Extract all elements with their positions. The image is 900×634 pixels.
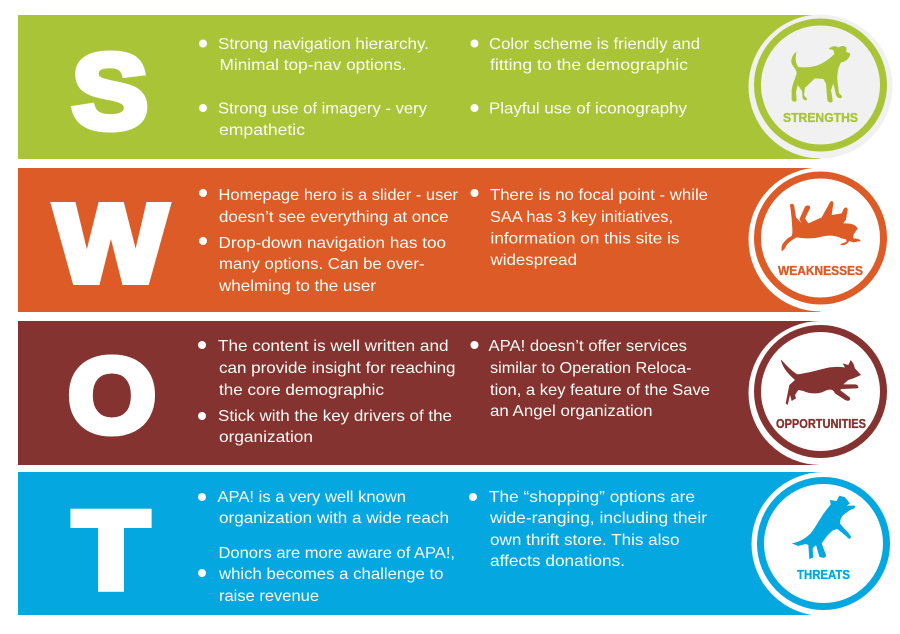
weaknesses bullets, left column: Drop-down navigation has too (218, 235, 446, 252)
opportunities bullets, right column: tion, a key feature of the Save (490, 382, 710, 399)
strengths band (18, 15, 820, 159)
threats bullets, right column (469, 489, 708, 570)
opportunities bullets, right column: APA! doesn’t offer services (488, 338, 687, 355)
opportunities bullets, left column: The content is well written and (218, 338, 448, 355)
threats bullets, right column: own thrift store. This also (490, 532, 680, 549)
weaknesses bullets, right column: There is no focal point - while (490, 187, 708, 204)
weaknesses bullets, left column: many options. Can be over- (219, 256, 424, 273)
strengths bullets, right column: fitting to the demographic (490, 57, 688, 74)
big letter W: W (55, 182, 167, 306)
big letter T: T (73, 490, 149, 612)
threats bullets, left column: raise revenue (219, 588, 319, 605)
threats bullets, left column: APA! is a very well known (218, 489, 406, 506)
weaknesses band (18, 168, 820, 312)
weaknesses badge (748, 168, 892, 312)
threats bullets, right column: wide-ranging, including their (489, 510, 708, 527)
weaknesses bullets, right column: SAA has 3 key initiatives, (490, 209, 673, 226)
threats badge (752, 472, 896, 616)
badge label: opportunities: OPPORTUNITIES (776, 417, 866, 431)
threats band (18, 472, 824, 615)
opportunities bullets, right column: an Angel organization (490, 403, 652, 420)
weaknesses bullets, left column: Homepage hero is a slider - user (218, 187, 459, 204)
strengths bullets, right column: Playful use of iconography (489, 100, 687, 118)
threats bullets, left column: which becomes a challenge to (218, 566, 444, 583)
icon: dog rolling on its back (782, 201, 861, 252)
icon: rearing dog (792, 496, 855, 559)
strengths bullets, right column (470, 36, 700, 118)
opportunities bullets, left column (198, 338, 456, 446)
badge label: strengths: STRENGTHS (783, 111, 858, 125)
threats bullets, left column: Donors are more aware of APA!, (218, 545, 455, 562)
badge label: threats: THREATS (797, 568, 850, 582)
big letter O: O (68, 337, 156, 455)
weaknesses bullets, left column: whelming to the user (218, 278, 377, 295)
threats bullets, right column: The “shopping” options are (489, 489, 695, 506)
threats bullets, left column (198, 489, 455, 605)
icon: running dog (781, 359, 861, 405)
weaknesses bullets, right column (470, 187, 708, 269)
icon: standing dog (791, 46, 850, 102)
opportunities badge (748, 321, 892, 465)
weaknesses bullets, left column: doesn’t see everything at once (219, 209, 449, 226)
strengths bullets, right column: Color scheme is friendly and (489, 36, 700, 53)
strengths bullets, left column: Minimal top-nav options. (220, 57, 406, 74)
opportunities bullets, right column (470, 338, 710, 420)
opportunities band (18, 321, 820, 465)
opportunities bullets, left column: organization (219, 429, 313, 446)
strengths bullets, left column: Strong use of imagery - very (218, 100, 427, 118)
strengths badge (748, 14, 892, 158)
badge label: weaknesses: WEAKNESSES (778, 264, 863, 278)
strengths bullets, left column: Strong navigation hierarchy. (218, 36, 429, 53)
strengths bullets, left column (199, 36, 429, 139)
opportunities bullets, left column: the core demographic (219, 382, 384, 399)
strengths bullets, left column: empathetic (219, 122, 305, 139)
panel: weaknesses (18, 168, 892, 312)
opportunities bullets, left column: Stick with the key drivers of the (218, 408, 452, 425)
weaknesses bullets, right column: widespread (489, 252, 577, 269)
panel: strengths (18, 14, 892, 159)
weaknesses bullets, left column (199, 187, 459, 295)
panel: opportunities (18, 321, 892, 465)
threats bullets, right column: affects donations. (490, 553, 625, 570)
opportunities bullets, right column: similar to Operation Reloca- (490, 360, 692, 377)
panel: threats (18, 472, 896, 616)
threats bullets, left column: organization with a wide reach (219, 510, 449, 527)
big letter S: S (72, 33, 148, 151)
weaknesses bullets, right column: information on this site is (490, 230, 680, 248)
opportunities bullets, left column: can provide insight for reaching (219, 360, 456, 377)
